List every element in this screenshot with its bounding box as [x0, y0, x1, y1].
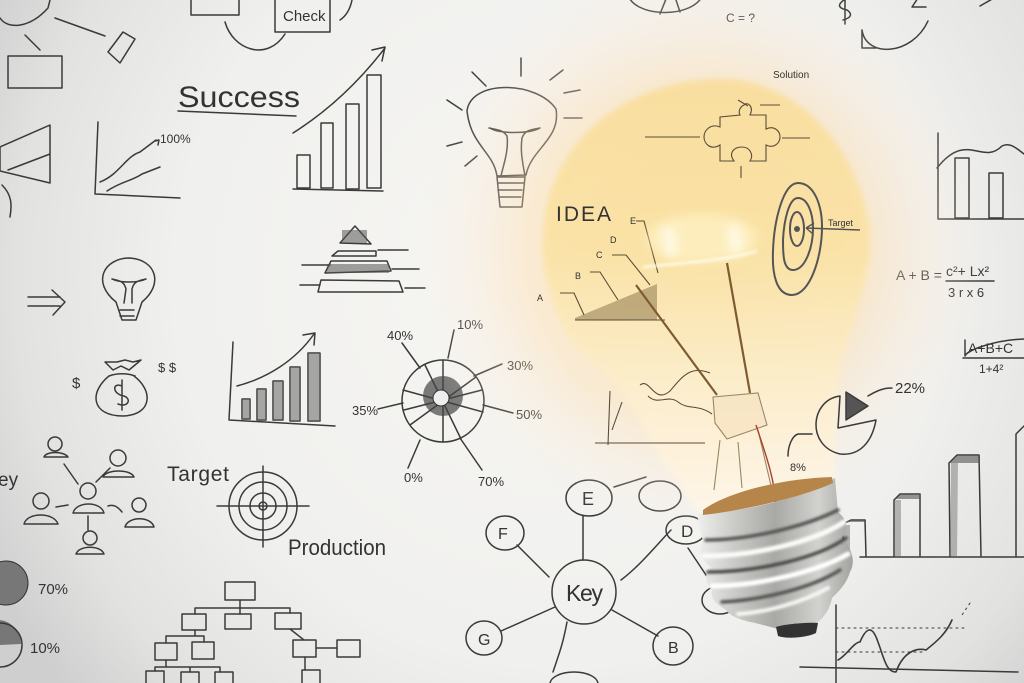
text: pie percentages: 50%: [516, 407, 542, 422]
chart: bar chart with trend: [229, 333, 335, 426]
sketch: puzzle piece: [645, 100, 810, 178]
text: Target: Target: [828, 218, 854, 228]
text: equation: c²+ Lx²: [946, 263, 990, 279]
icon: money bag: [96, 360, 147, 416]
text: mind map letters: Key: [566, 580, 604, 606]
text: equation: A + B =: [896, 267, 942, 283]
chart: left pie 70%: [0, 561, 68, 605]
text: chart labels: A: [537, 293, 543, 303]
text: chart labels: [537, 216, 636, 303]
icon: arrow and small bulb left: [28, 258, 155, 320]
glow around bulb: [380, 0, 1024, 600]
text: mind map letters: [478, 489, 693, 657]
text: mind map letters: E: [582, 489, 594, 509]
icon: target crosshair: [217, 466, 309, 547]
chart: left pie 70%: 70%: [38, 581, 68, 598]
text: dollar signs right: $ $: [158, 360, 177, 375]
text: right formula: [963, 339, 1024, 376]
chart: success rising bars: [293, 47, 385, 191]
sketch: key mind map: [466, 477, 738, 683]
text: 8%: 8%: [790, 462, 806, 474]
bulb glass: [542, 79, 870, 512]
base collar: [703, 477, 833, 515]
chart: pie with 22%: [788, 388, 892, 456]
text: chart labels: B: [575, 271, 581, 281]
chart: bottom right line chart: [800, 603, 1018, 683]
sketch: people network: [24, 437, 154, 554]
text: pie percentages: 35%: [352, 403, 378, 418]
text: chart labels: D: [610, 235, 617, 245]
screw base: [697, 478, 853, 632]
text: dollar signs: $: [72, 375, 81, 392]
chart: right bars: [937, 133, 1024, 219]
sketch: top centre pie: [628, 0, 702, 14]
text: mind map letters: F: [498, 526, 508, 543]
text: Check: Check: [283, 8, 326, 25]
chart: 3D bars right: [843, 426, 1024, 557]
glass stem: [713, 393, 772, 490]
text: pie percentages: 10%: [457, 317, 483, 332]
chart: leader lines: [560, 221, 665, 320]
text: pie percentages: 0%: [404, 470, 423, 485]
chart: left pie 10%: 10%: [30, 640, 60, 657]
text: right formula: A+B+C: [968, 340, 1013, 356]
base tip: [776, 623, 818, 638]
text: right formula: 1+4²: [979, 362, 1003, 376]
text: Production: Production: [288, 535, 386, 560]
text: Solution: Solution: [773, 70, 809, 81]
text: pie percentages: [352, 317, 542, 489]
text: top equation: C = ?: [726, 11, 755, 25]
chart: triangle bars: [575, 284, 657, 320]
icon: small triangle pyramid with arrows: [300, 226, 425, 292]
filament highlight: [647, 214, 757, 262]
text: mind map letters: G: [478, 632, 490, 649]
chart: through-glass line chart: [595, 370, 712, 445]
text: 22%: 22%: [895, 380, 925, 397]
text: chart labels: C: [596, 250, 603, 260]
filament wires: [636, 263, 750, 395]
text: pie percentages: 30%: [507, 358, 533, 373]
light bulb: [537, 79, 892, 638]
text: equation: 3 r x 6: [948, 285, 984, 300]
screw threads: [704, 510, 848, 614]
text: 100%: 100%: [160, 132, 191, 146]
text: chart labels: E: [630, 216, 636, 226]
sketch: top left diagram: [0, 0, 135, 88]
sketch: top right dollar and arrows: [840, 0, 994, 49]
text: pie percentages: 40%: [387, 328, 413, 343]
chart: left pie 10%: [0, 620, 60, 667]
chart: small line graph: [95, 122, 180, 198]
chart: radial pie: [378, 330, 513, 470]
chart: organisation flowchart: [146, 582, 360, 683]
text: Target: Target: [167, 463, 229, 486]
icon: sketched light bulb top: [447, 58, 582, 207]
text: mind map letters: B: [668, 640, 679, 657]
sketch: left pyramid: [0, 125, 50, 217]
sketches seen through glass: [537, 100, 892, 456]
sketch: target oval: [773, 183, 860, 295]
text: IDEA: IDEA: [556, 203, 611, 226]
text: pie percentages: 70%: [478, 474, 504, 489]
text: equation: [896, 263, 994, 300]
text: mind map letters: D: [681, 522, 693, 541]
heading: Success: Success: [178, 81, 300, 114]
sketch: top check boxes: [191, 0, 352, 50]
